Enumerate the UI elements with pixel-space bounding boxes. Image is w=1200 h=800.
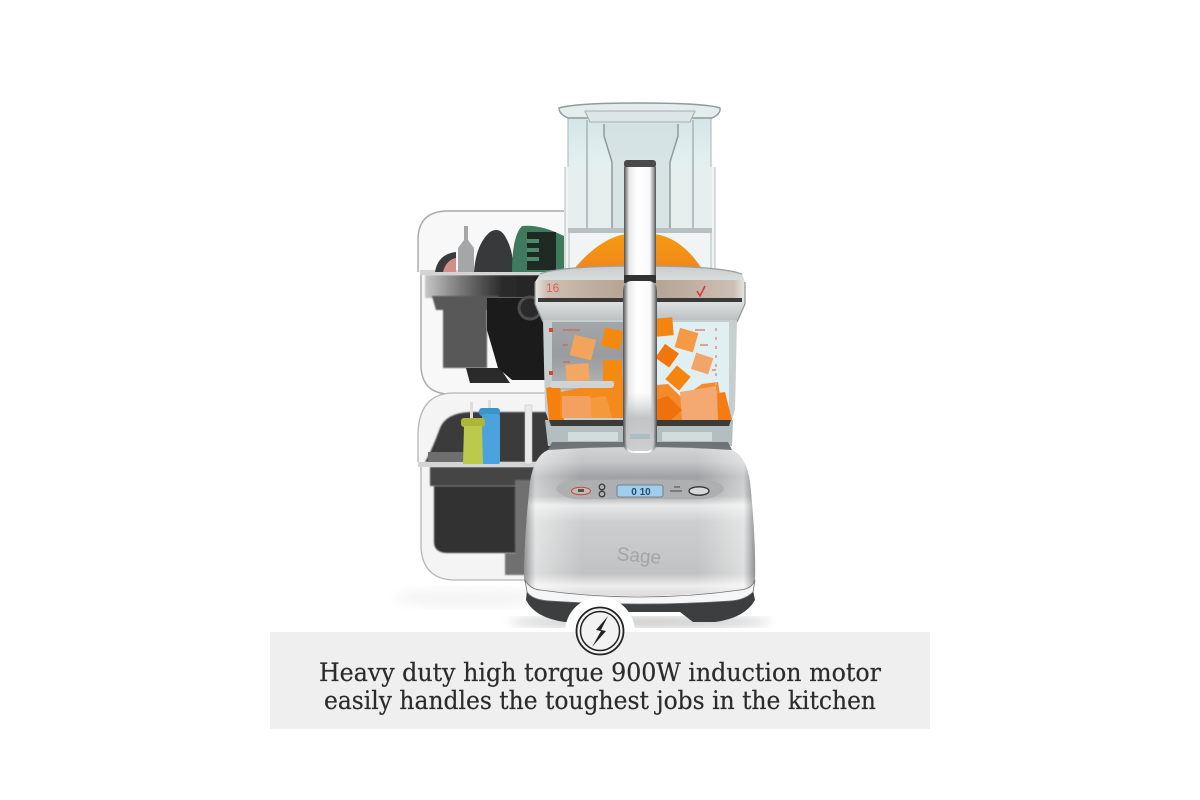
chrome trim and dark feet bbox=[525, 580, 755, 622]
pusher and feed chute bbox=[559, 103, 720, 270]
measuring marks bbox=[563, 330, 716, 370]
ingredient cubes bbox=[546, 317, 732, 421]
caption panel bbox=[270, 597, 930, 729]
storage box: bottom, holding pushers bbox=[418, 393, 552, 580]
motor base: brushed steel bbox=[524, 447, 755, 596]
LCD timer display: 0 10 bbox=[631, 487, 651, 498]
caption text bbox=[319, 658, 881, 715]
bowl base bbox=[545, 420, 733, 452]
storage box: top, holding discs bbox=[418, 211, 564, 394]
caption text: Heavy duty high torque 900W induction motor bbox=[319, 658, 881, 687]
lid bbox=[559, 103, 720, 118]
control panel bbox=[556, 480, 724, 499]
capacity mark: 16 bbox=[546, 281, 560, 295]
orange dome bbox=[574, 234, 702, 269]
handle: chrome upper and lower bbox=[623, 160, 657, 453]
brand logo: Sage bbox=[616, 544, 662, 569]
caption text: easily handles the toughest jobs in the kitchen bbox=[324, 686, 876, 715]
product illustration: food processor with storage boxes bbox=[395, 103, 770, 627]
LCD timer display bbox=[617, 485, 663, 498]
icon: lightning bolt badge bbox=[565, 597, 635, 654]
bowl collar with bronze band bbox=[535, 266, 745, 322]
glass work bowl with cubes bbox=[543, 317, 737, 422]
